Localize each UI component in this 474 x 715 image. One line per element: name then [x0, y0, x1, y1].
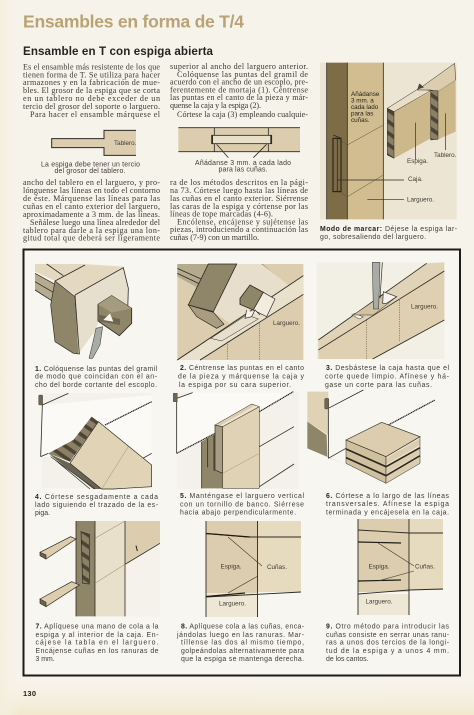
step 9 caption	[326, 624, 450, 663]
text block: centre column bottom: cuñas (7-9) con un martillo.	[170, 233, 259, 242]
text block: left column top: bles. El grosor de la espiga que se corta	[23, 86, 160, 95]
text block: left column top: en un tablero no debe exceder de un	[23, 94, 160, 103]
text block: centre column top: Colóquense las puntas del gramil de	[177, 70, 308, 79]
step 8 caption: tíllense las dos al mismo tiempo,	[181, 640, 304, 646]
step 9 labels: Larguero.	[366, 598, 393, 606]
step 5 caption	[180, 493, 304, 516]
text block: centre column bottom: las cuñas en el canto exterior. Siérrense	[170, 194, 308, 203]
text block: centre column top: acuerdo con el ancho de un escoplo, pre-	[170, 78, 308, 86]
diagram: tablero tenon	[52, 129, 138, 156]
step 9 labels: Cuñas.	[415, 564, 435, 570]
text block: left column bottom: cuñas en el canto exterior del larguero,	[23, 202, 160, 211]
step 4 illustration	[39, 393, 152, 489]
step 1 illustration	[35, 264, 132, 358]
step 7 caption: 3 mm.	[36, 656, 55, 663]
text block: centre column bottom: líneas de tope marcadas (4-6).	[170, 210, 273, 218]
step 9 caption: 9. Otro método para introducir las	[326, 624, 450, 630]
step 2 illustration	[177, 264, 303, 360]
text block: centre column bottom: Encólense, encájense y sujétense las	[177, 218, 308, 226]
step 2 caption: de la pieza y márquense la caja y	[178, 374, 305, 381]
step 2 caption: 2. Céntrense las puntas en el canto	[180, 365, 304, 372]
step 9 labels	[366, 564, 435, 606]
page number: 130	[23, 689, 36, 698]
labels: modo de marcar: 3 mm. a	[351, 98, 374, 104]
section heading: Ensamble en T con espiga abierta	[23, 45, 214, 58]
step 8 caption: 8. Aplíquese cola a las cuñas, enca-	[181, 624, 304, 630]
caption: tenon thickness: La espiga debe tener un tercio	[41, 162, 140, 168]
step 4 caption: piga.	[35, 510, 50, 517]
step 9 illustration	[358, 519, 443, 615]
text block: left column bottom: de éste. Márquense las líneas para las	[23, 194, 160, 203]
step 6 caption: terminada y encájesela en la caja.	[326, 510, 449, 516]
caption: modo de marcar: Déjese la espiga lar-	[385, 226, 457, 233]
step 3 caption: 3. Desbástese la caja hasta que el	[326, 365, 449, 372]
step 4 caption: 4. Córtese sesgadamente a cada	[35, 494, 158, 501]
step 3 illustration	[317, 262, 444, 359]
text block: left column bottom: ancho del tablero en el larguero, y pro-	[23, 178, 160, 187]
step 9 caption: ras a unos dos tercios de la longi-	[326, 640, 449, 646]
caption: modo de marcar: go, sobresaliendo del larguero.	[320, 234, 426, 241]
step 6 illustration	[307, 390, 435, 483]
text block: left column bottom: tablero para darle a la espiga una lon-	[23, 226, 160, 235]
labels: modo de marcar: Espiga.	[407, 158, 428, 165]
illustration: modo de marcar	[320, 63, 457, 219]
panel: numbered steps	[24, 250, 460, 676]
text block: left column top: Para hacer el ensamble márquese el	[30, 110, 161, 119]
step 2 label: Larguero.	[273, 320, 300, 327]
panel frame	[24, 250, 460, 676]
text block: left column bottom: gitud total que deberá ser ligeramente	[23, 234, 160, 243]
step 4 caption: lado siguiendo el trazado de la es-	[35, 502, 158, 509]
labels: modo de marcar: para las	[351, 110, 373, 118]
step 8 labels	[219, 564, 287, 608]
text block: centre column bottom: las caras de la espiga y córtense por las	[170, 202, 308, 211]
step 2 caption	[178, 365, 305, 389]
step 3 label: Larguero.	[411, 304, 438, 310]
labels: modo de marcar: Caja.	[408, 176, 423, 183]
text block: centre column bottom: ra de los métodos descritos en la pági-	[170, 178, 308, 187]
text block: centre column top: superior al ancho del larguero anterior.	[170, 62, 308, 71]
diagram: mortise with wedge allowance	[178, 128, 300, 158]
step 1 caption: cho del borde cortante del escoplo.	[35, 382, 157, 389]
step 1 caption: de modo que coincidan con el an-	[35, 374, 157, 381]
step 4 caption	[35, 494, 158, 517]
labels: modo de marcar	[351, 91, 457, 204]
step 8 labels: Espiga.	[220, 564, 242, 570]
caption: add 3 mm: Añádanse 3 mm. a cada lado	[195, 160, 291, 167]
step 9 labels: Espiga.	[368, 564, 390, 570]
step 5 caption: con un tornillo de banco. Siérrese	[180, 502, 304, 508]
text block: centre column bottom: na 73. Córtese luego hasta las líneas de	[170, 186, 308, 195]
labels: modo de marcar: Añádanse	[351, 91, 380, 98]
caption: tenon thickness: del grosor del tablero.	[54, 168, 126, 175]
labels: modo de marcar: cada lado	[351, 104, 379, 111]
step 3 caption: gase un corte para las cuñas.	[325, 382, 432, 389]
step 7 caption: Encájense cuñas en los ranuras de	[36, 648, 159, 655]
step 5 caption: hacia abajo perpendicularmente.	[180, 510, 296, 516]
labels: modo de marcar: Tablero.	[434, 152, 457, 159]
step 8 labels: Cuñas.	[267, 564, 287, 571]
step 7 caption: 7. Aplíquese una mano de cola a la	[36, 624, 159, 630]
step 8 illustration	[206, 521, 301, 617]
step 7 illustration	[40, 521, 160, 616]
step 6 caption: 6. Córtese a lo largo de las líneas	[326, 493, 450, 500]
step 9 caption: de los cantos.	[326, 656, 369, 663]
caption: add 3 mm: para las cuñas.	[218, 166, 268, 174]
text block: left column bottom: lónguense las líneas en todo el contorno	[23, 186, 160, 195]
text block: left column bottom	[23, 178, 161, 243]
text block: centre column top	[170, 62, 308, 119]
step 1 caption	[35, 366, 157, 389]
step 5 illustration	[173, 392, 298, 489]
labels: modo de marcar: cuñas.	[351, 117, 370, 124]
text block: left column top: tienen forma de T. Se utiliza para hacer	[23, 70, 160, 79]
step 7 caption	[36, 624, 159, 663]
text block: centre column top: las puntas en el canto de la pieza y már-	[170, 93, 308, 102]
step 5 caption: 5. Manténgase el larguero vertical	[180, 493, 304, 500]
text block: centre column top: Córtese la caja (3) empleando cualquie-	[177, 110, 308, 119]
text block: centre column top: ferentemente de mortaja (1). Céntrense	[170, 85, 308, 94]
step 8 labels: Larguero.	[219, 600, 246, 608]
caption: modo de marcar	[320, 226, 457, 241]
step 6 caption	[326, 493, 450, 516]
text block: left column bottom: Señálese luego una línea alrededor del	[30, 218, 161, 227]
step 7 caption: espiga y al interior de la caja. En-	[36, 632, 158, 639]
step 3 caption: corte quede limpio. Afínese y há-	[325, 374, 449, 381]
text block: left column top: tercio del grosor del soporte o larguero.	[23, 102, 160, 111]
text block: left column top: Es el ensamble más resistente de los que	[23, 62, 160, 72]
step 9 caption: cuñas consiste en serrar unas ranu-	[326, 632, 449, 639]
caption: modo de marcar: Modo de marcar:	[320, 226, 382, 233]
step 9 caption: tud de la espiga y a unos 4 mm.	[326, 648, 449, 655]
step 3 caption	[325, 365, 449, 389]
text block: left column top: armazones y en la fabricación de mue-	[23, 78, 160, 87]
step 6 caption: transversales. Afínese la espiga	[326, 501, 449, 508]
step 1 caption: 1. Colóquense las puntas del gramil	[35, 366, 157, 373]
labels: modo de marcar: Larguero.	[407, 196, 434, 204]
step 8 caption: que la espiga se mantenga derecha.	[181, 656, 304, 663]
text block: centre column bottom	[170, 178, 308, 242]
text block: left column bottom: aproximadamente a 3 mm. de las líneas.	[23, 210, 160, 219]
title: Ensambles en forma de T/4	[23, 12, 244, 32]
caption: add 3 mm	[195, 160, 291, 174]
caption: tenon thickness	[41, 162, 140, 175]
step 8 caption: golpeándolas alternativamente para	[181, 648, 304, 655]
step 2 caption: la espiga por su cara superior.	[179, 382, 291, 389]
text block: left column top	[23, 62, 161, 119]
label: tablero: Tablero.	[114, 140, 137, 147]
step 7 caption: cájese la tabla en el larguero.	[36, 640, 159, 646]
step 8 caption: jándolas luego en las ranuras. Mar-	[176, 632, 304, 639]
text block: centre column top: quense la caja y la espiga (2).	[170, 101, 261, 110]
text block: centre column bottom: piezas, introduciendo a continuación las	[170, 225, 308, 234]
step 8 caption	[176, 624, 304, 663]
